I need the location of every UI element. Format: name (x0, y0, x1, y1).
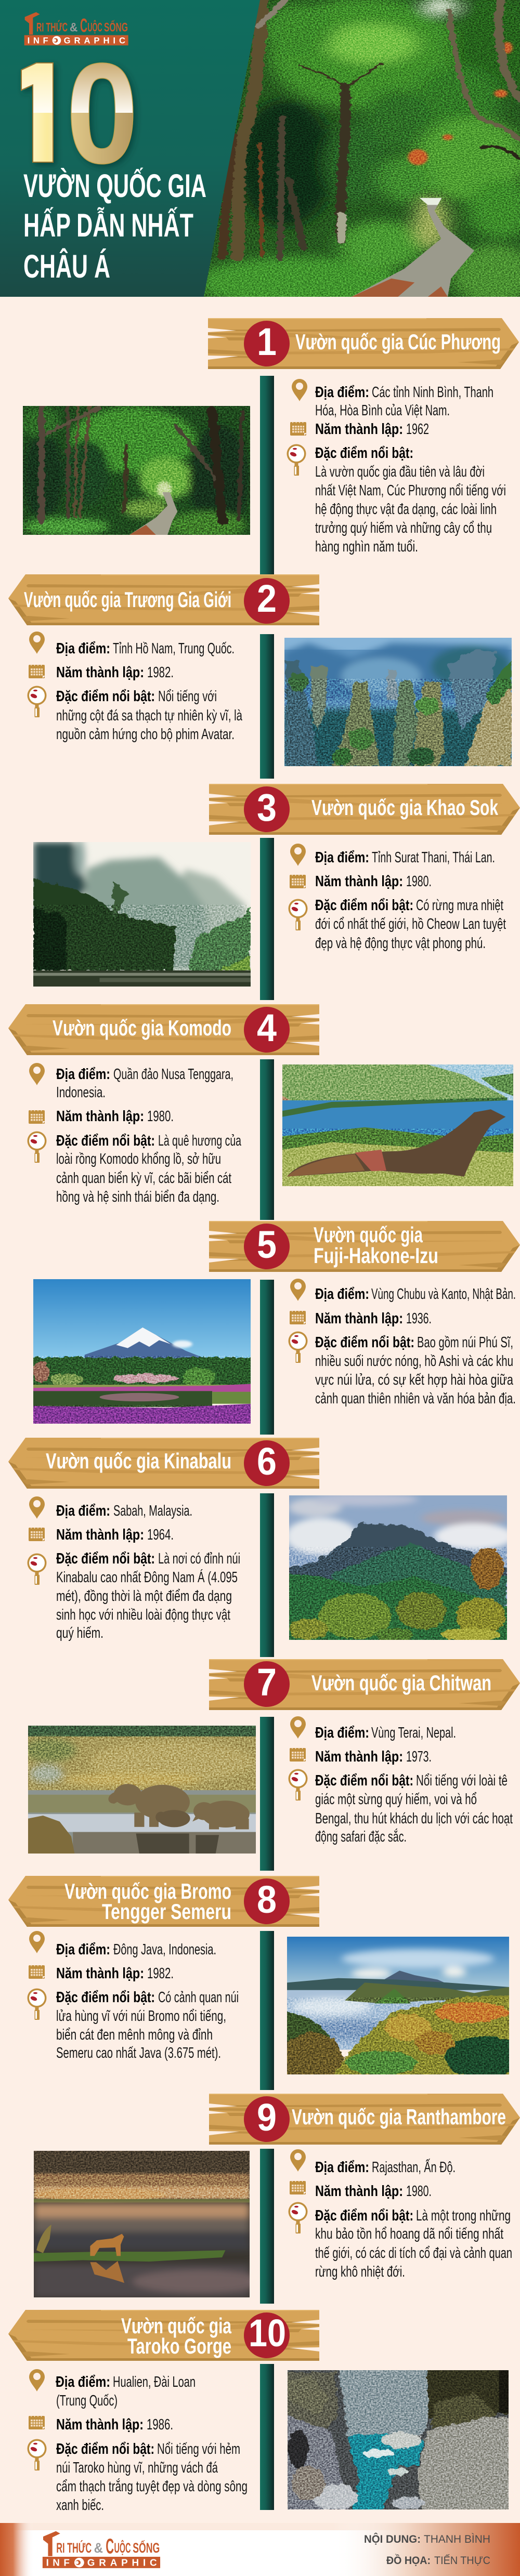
pole (260, 1059, 274, 1220)
pole (260, 2149, 274, 2304)
logo: Tri Thuc & Cuoc Song infographic: C (80, 15, 87, 36)
signpost 10 (8, 2310, 319, 2361)
icon: location pin (290, 2149, 306, 2172)
credits (364, 2533, 490, 2567)
signpost 4: 4 (257, 1006, 277, 1049)
footer logo: C (106, 2534, 114, 2558)
icon: calendar (290, 1747, 306, 1762)
text: Bromo details: Đông Java, Indonesia. (113, 1941, 216, 1958)
icon: calendar (29, 664, 45, 678)
section 8: Bromo Tengger Semeru (8, 1876, 520, 2090)
icon: calendar (29, 1964, 45, 1979)
photo: Mount Kinabalu (289, 1495, 507, 1640)
text: Truong Gia Gioi details: 1982. (147, 664, 174, 681)
text: Bromo details: Semeru cao nhất Java (3.675 mét). (56, 2045, 221, 2061)
footer logo: UỘC (114, 2540, 131, 2556)
signpost 8 (8, 1876, 319, 1927)
photo: elephants (28, 1726, 256, 1854)
big number 10 (21, 62, 138, 169)
signpost 2: Vườn quốc gia Trương Gia Giới (24, 587, 231, 612)
section 1: Cuc Phuong (20, 318, 519, 574)
text: Komodo details (56, 1066, 242, 1205)
logo: Tri Thuc & Cuoc Song infographic: GRAPHIC (64, 35, 125, 45)
logo: Tri Thuc & Cuoc Song infographic: UỘC (87, 20, 102, 35)
text: Bromo details (56, 1941, 239, 2061)
signpost 4: Vườn quốc gia Komodo (53, 1016, 231, 1040)
text: Taroko Gorge details (56, 2374, 248, 2514)
text: Bromo details: Có cảnh quan núi (158, 1989, 239, 2006)
text: Chitwan details: Đặc điểm nổi bật: (315, 1772, 413, 1789)
photo: Cuc Phuong road (23, 406, 250, 535)
icon: magnifier (27, 1131, 47, 1163)
text: Fuji-Hakone-Izu details: Năm thành lập: (315, 1310, 403, 1327)
text: Taroko Gorge details: (Trung Quốc) (56, 2393, 118, 2409)
icon: location pin (29, 632, 45, 654)
photo: Zhangjiajie pillars (284, 638, 512, 766)
text: Fuji-Hakone-Izu details: Đặc điểm nổi bật: (315, 1334, 414, 1351)
signpost 5 (209, 1221, 520, 1272)
text: Ranthambore details (315, 2158, 512, 2280)
signpost 8: Vườn quốc gia Bromo (64, 1879, 231, 1903)
text: Kinabalu details: Sabah, Malaysia. (113, 1503, 192, 1519)
photo: forest road (204, 0, 520, 297)
text: Cuc Phuong details: hàng nghìn năm tuổi. (315, 538, 418, 555)
pole (260, 1717, 274, 1871)
text: Truong Gia Gioi details: Nổi tiếng với (158, 688, 217, 705)
text: Ranthambore details: 1980. (406, 2183, 432, 2200)
photo: Mount Fuji (33, 1279, 251, 1424)
icon: magnifier (288, 899, 308, 930)
footer logo (43, 2531, 160, 2568)
signpost 10: Taroko Gorge (127, 2334, 231, 2358)
text: Khao Sok details: 1980. (406, 873, 432, 890)
text: Ranthambore details: Năm thành lập: (315, 2183, 403, 2200)
icon: calendar (29, 1527, 45, 1541)
text: Cuc Phuong details: Năm thành lập: (315, 421, 403, 438)
text: Khao Sok details: Đặc điểm nổi bật: (315, 897, 413, 914)
text: Truong Gia Gioi details: Đặc điểm nổi bật: (56, 688, 155, 705)
text: Taroko Gorge details: xanh biếc. (56, 2497, 104, 2514)
text: Taroko Gorge details: Hualien, Đài Loan (113, 2374, 196, 2390)
text: Komodo details: Năm thành lập: (56, 1108, 144, 1125)
text: Kinabalu details: mét), đồng thời là một điểm đa dạng (56, 1588, 232, 1605)
text: Taroko Gorge details: Địa điểm: (56, 2374, 110, 2390)
icon: calendar (29, 1109, 45, 1124)
text: Kinabalu details (56, 1503, 240, 1641)
text: Truong Gia Gioi details: những cột đá sa thạch tự nhiên kỳ vĩ, là (56, 707, 243, 724)
pole (260, 634, 274, 779)
text: Truong Gia Gioi details: Tỉnh Hồ Nam, Trung Quốc. (113, 640, 235, 657)
text: Cuc Phuong details (315, 384, 506, 555)
icon: location pin (292, 379, 307, 401)
text: Taroko Gorge details: 1986. (147, 2416, 173, 2433)
icon: location pin (290, 1279, 306, 1301)
signpost 10: Vườn quốc gia (121, 2314, 231, 2338)
icon: magnifier (27, 2439, 47, 2470)
text: Chitwan details: 1973. (406, 1749, 432, 1765)
text: Taroko Gorge details: núi Taroko hùng vĩ, những vách đá (56, 2460, 218, 2476)
section 3: Khao Sok (33, 784, 520, 1000)
section 9: Ranthambore (33, 2094, 520, 2304)
text: Cuc Phuong details: Hóa, Hòa Bình của Việt Nam. (315, 402, 450, 419)
photo: Komodo dragon (282, 1064, 513, 1186)
signpost 9: 9 (257, 2096, 277, 2139)
text: Taroko Gorge details: Nổi tiếng với hẻm (157, 2441, 240, 2457)
signpost 8: 8 (257, 1878, 277, 1921)
text: Truong Gia Gioi details: Năm thành lập: (56, 664, 144, 681)
text: Khao Sok details: Địa điểm: (315, 849, 369, 866)
text: Khao Sok details (315, 849, 506, 952)
text: Cuc Phuong details: 1962 (406, 421, 429, 438)
signpost 3 (209, 784, 520, 835)
text: Kinabalu details: Năm thành lập: (56, 1527, 144, 1543)
text: Ranthambore details: Rajasthan, Ấn Độ. (372, 2158, 456, 2176)
icon: magnifier (288, 1769, 308, 1800)
signpost 7 (209, 1659, 520, 1710)
text: Ranthambore details: rừng khô nhiệt đới. (315, 2264, 405, 2280)
text: Cuc Phuong details: Đặc điểm nổi bật: (315, 445, 413, 462)
signpost 7: 7 (257, 1661, 277, 1704)
icon: location pin (29, 1931, 45, 1953)
text: Bromo details: Năm thành lập: (56, 1965, 144, 1982)
pole (260, 1493, 274, 1657)
text: Komodo details: Là quê hương của (158, 1133, 242, 1149)
section 2: Truong Gia Gioi (8, 574, 512, 779)
text: Cuc Phuong details: Địa điểm: (315, 384, 369, 401)
icon: location pin (29, 1063, 45, 1085)
icon: calendar (290, 2180, 306, 2194)
footer logo: INF (46, 2557, 70, 2568)
pole (260, 376, 274, 574)
text: Taroko Gorge details: Năm thành lập: (56, 2416, 144, 2433)
signpost 1 (208, 318, 519, 369)
text: Kinabalu details: Kinabalu cao nhất Đông Nam Á (4.095 (56, 1569, 238, 1586)
icon: magnifier (27, 1553, 47, 1585)
icon: calendar (29, 2415, 45, 2429)
footer logo: GRAPHIC (87, 2557, 157, 2568)
text: Komodo details: Quần đảo Nusa Tenggara, (113, 1066, 233, 1083)
footer (0, 2523, 520, 2576)
title: VƯỜN QUỐC GIA (23, 167, 206, 204)
section 4: Komodo (8, 1004, 513, 1220)
pole (260, 2364, 274, 2510)
text: Truong Gia Gioi details: nguồn cảm hứng cho bộ phim Avatar. (56, 726, 235, 743)
photo: Bromo volcano (287, 1937, 509, 2074)
signpost 5: Vườn quốc gia (314, 1223, 423, 1247)
icon: magnifier (27, 1989, 47, 2020)
text: Chitwan details: Địa điểm: (315, 1725, 369, 1741)
photo: Khao Sok lake (33, 842, 251, 987)
text: Komodo details: 1980. (147, 1108, 174, 1125)
signpost 6: Vườn quốc gia Kinabalu (46, 1449, 231, 1473)
text: Fuji-Hakone-Izu details: Địa điểm: (315, 1286, 369, 1303)
text: Kinabalu details: Là nơi có đỉnh núi (158, 1550, 240, 1567)
big number 10: 0 (66, 34, 138, 193)
text: Komodo details: Địa điểm: (56, 1066, 110, 1083)
text: Bromo details: lửa hùng vĩ với núi Bromo nổi tiếng, (56, 2008, 226, 2025)
footer logo: SỐNG (133, 2539, 160, 2556)
text: Bromo details: Địa điểm: (56, 1941, 110, 1958)
section 7: Chitwan (23, 1659, 520, 1871)
icon: location pin (29, 1496, 45, 1519)
footer logo: & (94, 2540, 103, 2556)
text: Komodo details: Đặc điểm nổi bật: (56, 1133, 155, 1149)
logo: Tri Thuc & Cuoc Song infographic (24, 12, 128, 45)
green title panel (0, 0, 260, 297)
photo: Taroko gorge (288, 2370, 509, 2509)
signpost 6 (8, 1438, 319, 1489)
text: Komodo details: Indonesia. (56, 1084, 106, 1101)
text: Truong Gia Gioi details: Địa điểm: (56, 640, 110, 657)
logo: Tri Thuc & Cuoc Song infographic: & (70, 21, 77, 35)
section 6: Kinabalu (8, 1438, 514, 1657)
text: Bromo details: 1982. (147, 1965, 174, 1982)
title (23, 167, 206, 285)
section 10: Taroko Gorge (8, 2310, 512, 2514)
signpost 3: 3 (257, 786, 277, 829)
section 5: Fuji-Hakone-Izu (27, 1221, 520, 1435)
pole (260, 838, 274, 1000)
icon: location pin (29, 2369, 45, 2391)
logo: Tri Thuc & Cuoc Song infographic: SỐNG (104, 20, 128, 35)
icon: magnifier (288, 2202, 308, 2233)
icon: location pin (290, 1716, 306, 1739)
text: Komodo details: cảnh quan biển kỳ vĩ, các bãi biển cát (56, 1170, 231, 1187)
text: Chitwan details: Năm thành lập: (315, 1749, 403, 1765)
credits: ĐỒ HỌA: (386, 2554, 431, 2567)
signpost 4 (8, 1004, 319, 1055)
text: Fuji-Hakone-Izu details: 1936. (406, 1310, 432, 1327)
credits: THANH BÌNH (424, 2533, 490, 2545)
signpost 10: 10 (249, 2311, 286, 2355)
text: Kinabalu details: Đặc điểm nổi bật: (56, 1550, 155, 1567)
icon: magnifier (27, 686, 47, 717)
signpost 9 (209, 2094, 520, 2145)
text: Kinabalu details: 1964. (147, 1527, 174, 1543)
signpost 2: 2 (257, 577, 277, 620)
title: HẤP DẪN NHẤT (23, 207, 193, 244)
big number 10: 0 (66, 34, 138, 193)
signpost 1: 1 (257, 320, 277, 363)
icon: calendar (290, 1310, 306, 1324)
text: Bromo details: biển cát đen mênh mông và đỉnh (56, 2027, 213, 2043)
signpost 6: 6 (257, 1440, 277, 1483)
text: Komodo details: hồng và hệ sinh thái biển đa dạng. (56, 1189, 219, 1205)
pole (260, 1280, 274, 1435)
pole (260, 1931, 274, 2090)
signpost 8: Tengger Semeru (102, 1899, 231, 1924)
icon: calendar (290, 421, 306, 436)
text: Komodo details: loài rồng Komodo khổng lồ, sở hữu (56, 1151, 221, 1167)
text: Chitwan details: động safari đặc sắc. (315, 1828, 407, 1845)
text: Ranthambore details: Địa điểm: (315, 2159, 369, 2176)
text: Chitwan details: Vùng Terai, Nepal. (371, 1725, 456, 1741)
footer logo: RI THỨC (56, 2540, 92, 2556)
text: Ranthambore details: Đặc điểm nổi bật: (315, 2207, 413, 2224)
text: Kinabalu details: Địa điểm: (56, 1503, 110, 1519)
credits: NỘI DUNG: (364, 2533, 421, 2545)
text: Khao Sok details: Năm thành lập: (315, 873, 403, 890)
text: Fuji-Hakone-Izu details (315, 1286, 516, 1407)
credits: TIẾN THỰC (434, 2555, 490, 2567)
icon: calendar (290, 874, 306, 888)
signpost 5: Fuji-Hakone-Izu (314, 1243, 438, 1268)
title: CHÂU Á (23, 248, 110, 285)
text: Taroko Gorge details: cẩm thạch trắng tuyệt đẹp và dòng sông (56, 2478, 248, 2495)
text: Taroko Gorge details: Đặc điểm nổi bật: (56, 2441, 154, 2457)
logo: Tri Thuc & Cuoc Song infographic: INF (28, 35, 48, 45)
icon: location pin (290, 844, 306, 866)
text: Truong Gia Gioi details (56, 640, 243, 743)
hero banner (0, 0, 520, 308)
text: Kinabalu details: quý hiếm. (56, 1625, 103, 1641)
text: Bromo details: Đặc điểm nổi bật: (56, 1989, 155, 2006)
signpost 2 (8, 574, 319, 625)
icon: magnifier (287, 444, 306, 476)
signpost 5: 5 (257, 1223, 277, 1266)
icon: magnifier (288, 1332, 308, 1363)
logo: Tri Thuc & Cuoc Song infographic: RI THỨC (36, 20, 68, 35)
photo: tiger by the lake (34, 2151, 250, 2297)
text: Chitwan details (315, 1725, 513, 1845)
text: Kinabalu details: sinh học với nhiều loài động thực vật (56, 1607, 230, 1623)
